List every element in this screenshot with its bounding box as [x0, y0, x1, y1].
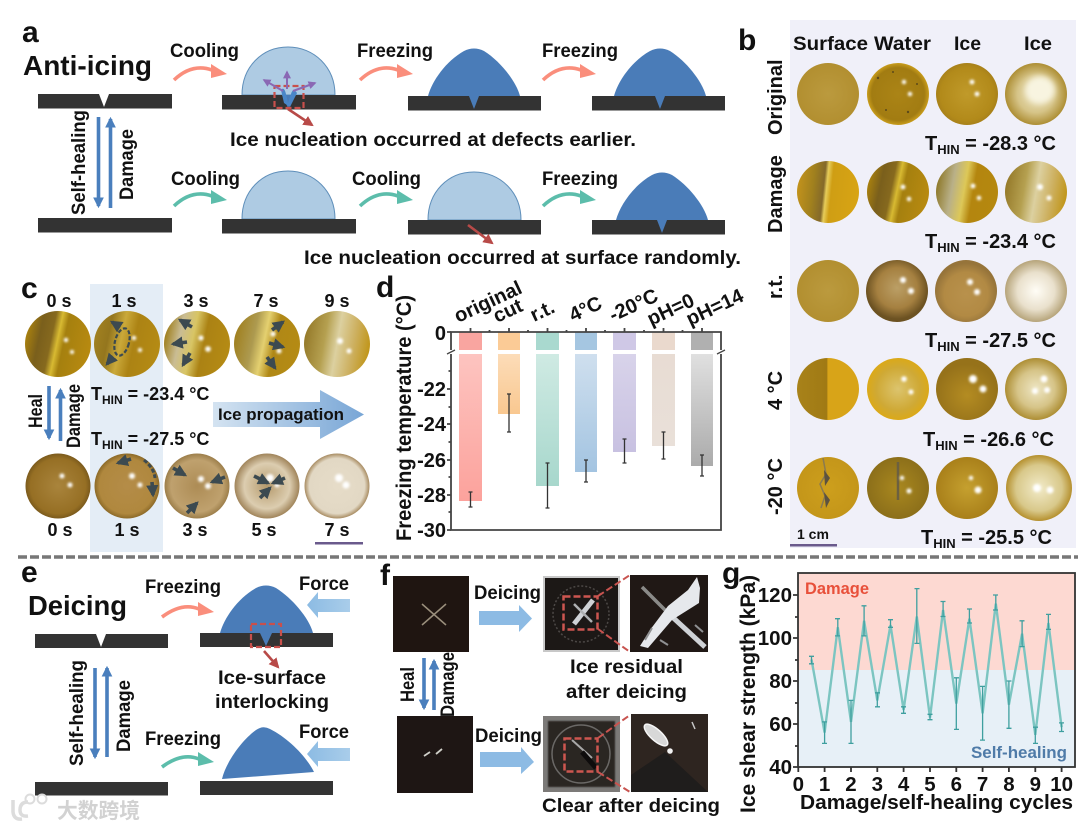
column headers: Water [874, 33, 931, 55]
category labels: cut [490, 295, 527, 328]
bottom time labels: 0 s [47, 520, 73, 540]
row labels: r.t. [765, 275, 787, 299]
photo: clear close-up [631, 714, 708, 792]
row 1 step labels: Cooling [170, 40, 239, 62]
healed surface freezing photos [26, 454, 370, 518]
panel label b: b [738, 24, 756, 57]
curved arrow bottom [162, 752, 214, 767]
photo: clear [543, 716, 620, 792]
y tick labels: -28 [417, 485, 446, 507]
x tick labels: 5 [924, 773, 936, 796]
row 2 step labels: Cooling [171, 168, 240, 190]
bottom time labels [47, 520, 350, 540]
THIN damage: T [925, 231, 937, 253]
x axis title: Damage/self-healing cycles [800, 792, 1073, 814]
column headers: Ice [954, 33, 981, 55]
panel f: deicing photos [380, 559, 720, 817]
panel label a: a [22, 16, 39, 49]
top time labels: 0 s [46, 291, 72, 311]
row 2 water drop 1 [222, 171, 356, 234]
top time labels: 3 s [183, 291, 209, 311]
THIN values: T [91, 384, 102, 404]
row 1 water drop with defect nucleation [222, 47, 356, 125]
label self-healing: Self-healing [68, 110, 90, 215]
photo row: damage [797, 161, 1067, 223]
label force top: Force [299, 573, 349, 595]
category labels: r.t. [527, 296, 558, 327]
heal and damage arrows [397, 652, 459, 717]
category labels: original [451, 277, 526, 328]
THIN original: = -28.3 °C [960, 133, 1056, 155]
photo row: 4 degrees [797, 358, 1067, 420]
zoom lines top [598, 575, 630, 652]
bars [459, 332, 713, 501]
top time labels: 1 s [111, 291, 137, 311]
label force bottom: Force [299, 721, 349, 743]
column headers: Surface [793, 33, 868, 55]
arrow deicing bottom [480, 747, 534, 774]
x tick labels: 3 [872, 773, 883, 796]
row 1 ice drop [408, 48, 541, 110]
heading: Anti-icing: Anti-icing [23, 50, 152, 81]
row 1 frozen drop [592, 48, 725, 110]
row 1 step labels: Freezing [542, 40, 618, 62]
callout: ice residual: Ice residual [570, 656, 683, 678]
row 2 ice drop [592, 172, 725, 234]
propagation arrows, damaged [107, 320, 283, 368]
photo: ice residual close-up [630, 575, 708, 652]
category labels [451, 277, 748, 331]
THIN values [91, 384, 209, 452]
y tick labels: -26 [417, 450, 446, 472]
interlocked ice [200, 586, 333, 667]
y tick labels [417, 323, 447, 542]
callout: ice residual [566, 656, 687, 703]
photo: ice residual [543, 576, 620, 652]
heal and damage arrows [25, 384, 85, 448]
panel e: deicing schematic [13, 556, 350, 823]
curved arrow top [162, 602, 214, 617]
section divider [18, 555, 1078, 559]
THIN values: T [91, 429, 102, 449]
y tick labels: -22 [417, 379, 446, 401]
y tick labels: 0 [435, 323, 446, 345]
bottom time labels: 3 s [182, 520, 208, 540]
callout: defects: Ice nucleation occurred at defects earlier. [230, 129, 636, 151]
panel a: anti-icing schematic [22, 16, 741, 269]
callout: interlocking: Ice-surface [218, 667, 326, 689]
arrow: self-healing [93, 668, 97, 757]
photo row: room temperature [797, 260, 1067, 322]
panel label g: g [722, 557, 740, 590]
arrow: ice propagation [213, 390, 364, 439]
row 2 step labels: Freezing [542, 168, 618, 190]
panel d: freezing temperature bar chart [376, 271, 748, 542]
callout: ice residual: after deicing [566, 681, 687, 703]
THIN 4 C: T [923, 429, 935, 451]
row 2 water drop 2 [408, 172, 541, 243]
detached ice [200, 727, 333, 795]
row labels: -20 °C [765, 458, 787, 515]
photo row: original [797, 63, 1067, 125]
y tick labels [758, 584, 792, 779]
callout: clear: Clear after deicing [542, 795, 720, 817]
y tick labels: -24 [417, 414, 447, 436]
arrow: self-healing [97, 117, 100, 206]
THIN values: = -27.5 °C [123, 429, 209, 449]
panel label d: d [376, 271, 394, 304]
axes with break [447, 328, 725, 530]
bottom time labels: 7 s [324, 520, 350, 540]
column headers [793, 33, 1052, 55]
THIN original: HIN [937, 142, 960, 157]
row labels: 4 °C [765, 371, 787, 410]
damaged surface [38, 94, 172, 108]
y tick labels: 100 [758, 627, 792, 650]
THIN 4 C: = -26.6 °C [958, 429, 1054, 451]
y tick labels: 80 [769, 670, 792, 693]
row labels: Original [765, 59, 787, 135]
x tick labels: 8 [1003, 773, 1015, 796]
x tick labels: 1 [819, 773, 830, 796]
y axis title: Ice shear strength (kPa) [737, 575, 760, 813]
x tick labels: 2 [845, 773, 857, 796]
y tick labels: 120 [758, 584, 792, 607]
healed surface [38, 218, 172, 232]
label self-healing: Self-healing [66, 660, 88, 766]
row 2 step labels: Cooling [352, 168, 421, 190]
x tick labels: 0 [793, 773, 804, 796]
heading: Deicing: Deicing [28, 590, 127, 621]
panel label e: e [21, 556, 38, 589]
x tick labels [793, 773, 1073, 796]
row 1 step labels [170, 40, 618, 62]
arrow: ice propagation: Ice propagation [218, 405, 344, 424]
label freezing top: Freezing [145, 576, 221, 598]
THIN r.t.: = -27.5 °C [960, 330, 1056, 352]
panel background [790, 20, 1076, 548]
THIN r.t.: HIN [937, 339, 960, 354]
y axis title: Freezing temperature (°C) [393, 295, 416, 541]
force arrow bottom [307, 741, 350, 767]
column headers: Ice [1024, 33, 1052, 55]
label damage: Damage [113, 680, 135, 752]
axes [793, 573, 1075, 772]
arrow: damage [105, 668, 109, 757]
THIN -20 C: T [921, 527, 933, 549]
callout: randomly: Ice nucleation occurred at surface randomly. [304, 247, 741, 269]
label deicing bottom: Deicing [475, 725, 542, 747]
panel b: photo grid [738, 20, 1076, 551]
heal and damage arrows: Heal [397, 667, 419, 702]
zoom lines bottom [598, 715, 630, 792]
category labels: pH=14 [683, 285, 748, 331]
damaged surface [35, 634, 168, 648]
x tick labels: 10 [1050, 773, 1073, 796]
scale bar 1 cm [790, 526, 837, 546]
error bars [468, 394, 704, 508]
bottom time labels: 5 s [251, 520, 277, 540]
row 1 step labels: Freezing [357, 40, 433, 62]
top time labels: 7 s [253, 291, 279, 311]
scale bar 1 cm: 1 cm [797, 526, 829, 542]
plot background self-healing [798, 670, 1075, 767]
y tick labels: 40 [769, 756, 792, 779]
callout: interlocking: interlocking [215, 691, 329, 713]
arrow deicing top [479, 605, 532, 632]
panel c: freezing time series [21, 272, 370, 552]
plot background damage [798, 573, 1075, 670]
THIN -20 C: = -25.5 °C [956, 527, 1052, 549]
highlight column [90, 284, 163, 552]
heal and damage arrows: Heal [25, 394, 47, 428]
label deicing top: Deicing [474, 582, 541, 604]
label self-healing: Self-healing [971, 743, 1067, 762]
category labels: pH=0 [644, 290, 698, 331]
healed surface [35, 782, 168, 796]
THIN damage: = -23.4 °C [960, 231, 1056, 253]
THIN values: = -23.4 °C [123, 384, 209, 404]
propagation arrows, healed [118, 459, 285, 513]
category labels: 4°C [566, 292, 606, 327]
panel label f: f [380, 559, 391, 592]
heal and damage arrows: Damage [63, 384, 85, 448]
THIN 4 C: HIN [935, 438, 958, 453]
x tick labels: 4 [898, 773, 910, 796]
y tick labels: -30 [417, 520, 446, 542]
top time labels: 9 s [324, 291, 350, 311]
row 2 step labels [171, 168, 618, 190]
scale bar [315, 542, 363, 544]
row 1 pink arrows [174, 64, 596, 80]
THIN damage: HIN [937, 240, 960, 255]
photo: healed surface [397, 716, 473, 793]
y tick labels: 60 [769, 713, 792, 736]
watermark: 大数跨境 [57, 800, 140, 823]
x tick labels: 6 [951, 773, 962, 796]
row labels [765, 59, 787, 515]
photo: damaged surface [393, 576, 469, 652]
damaged surface freezing photos [25, 311, 370, 377]
panel label c: c [21, 272, 38, 305]
top time labels [46, 291, 350, 311]
THIN values: HIN [102, 438, 123, 452]
x tick labels: 7 [977, 773, 988, 796]
callout: interlocking [215, 667, 329, 713]
label damage: Damage [116, 129, 138, 200]
x tick labels: 9 [1030, 773, 1041, 796]
force arrow top [307, 592, 350, 618]
row 2 teal arrows [174, 190, 596, 206]
label freezing bottom: Freezing [145, 728, 221, 750]
category labels: -20°C [606, 285, 662, 327]
THIN values: HIN [102, 393, 123, 407]
heal and damage arrows: Damage [437, 652, 459, 717]
panel g: ice shear strength line chart [722, 557, 1075, 814]
arrow: damage [109, 119, 112, 208]
row labels: Damage [765, 155, 787, 233]
label damage: Damage [805, 579, 869, 598]
THIN r.t.: T [925, 330, 937, 352]
THIN -20 C: HIN [933, 536, 956, 551]
bottom time labels: 1 s [114, 520, 140, 540]
photo row: -20 degrees [797, 455, 1072, 521]
THIN original: T [925, 133, 937, 155]
watermark [13, 794, 140, 823]
error bars [809, 589, 1064, 743]
data line [812, 604, 1062, 735]
